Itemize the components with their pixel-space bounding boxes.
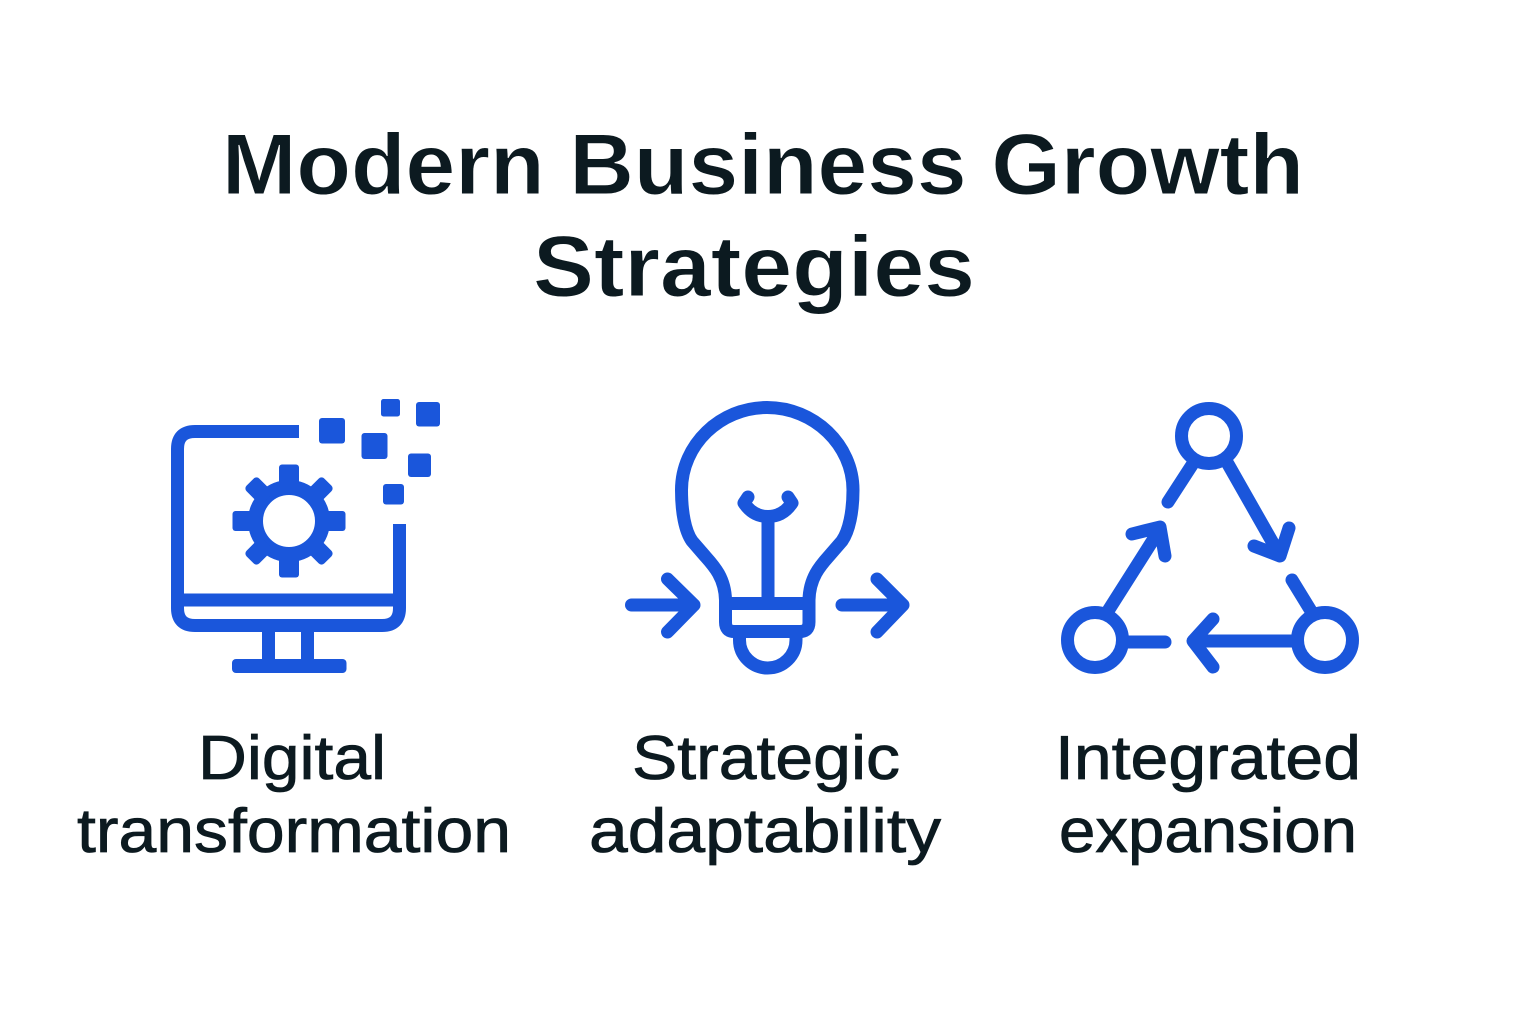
- label: strategic adaptability: adaptability: [589, 797, 941, 866]
- label: integrated expansion: [1055, 724, 1361, 866]
- label: strategic adaptability: [589, 724, 941, 866]
- icon: integrated expansion triangle cycle: [1068, 408, 1352, 668]
- label: integrated expansion: expansion: [1059, 797, 1357, 866]
- label: digital transformation: [77, 724, 511, 866]
- title: Modern Business Growth: [222, 117, 1304, 213]
- icon: digital transformation monitor: [178, 399, 440, 673]
- label: integrated expansion: Integrated: [1055, 724, 1361, 793]
- icon: output arrow: [842, 579, 903, 632]
- title: Strategies: [533, 219, 975, 315]
- icon: strategic adaptability light bulb: [632, 408, 903, 668]
- title: [222, 117, 1304, 315]
- label: digital transformation: Digital: [198, 724, 386, 793]
- label: strategic adaptability: Strategic: [632, 724, 900, 793]
- label: digital transformation: transformation: [77, 797, 511, 866]
- icon: input arrow: [632, 579, 694, 632]
